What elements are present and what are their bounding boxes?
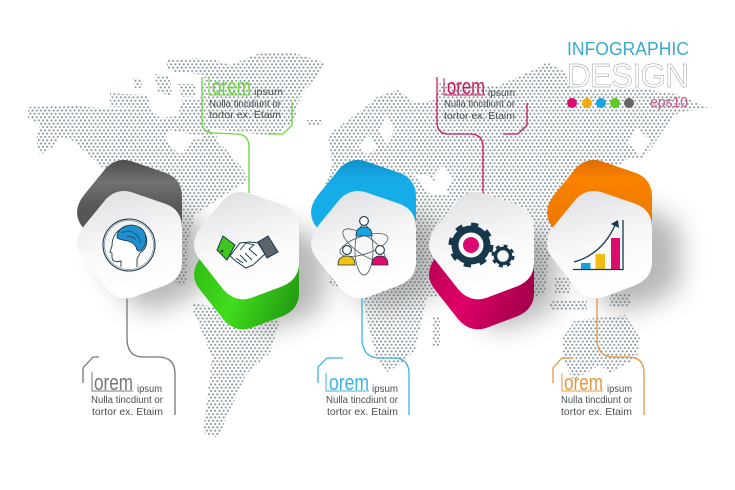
label: step 5 text: Nulla tincdiunt or xyxy=(561,394,632,406)
label: step 1 text xyxy=(91,370,163,418)
label: step 5 text xyxy=(561,370,632,418)
green back tab xyxy=(194,222,299,329)
white card xyxy=(429,192,534,299)
icon: head with brain xyxy=(103,219,155,271)
label: step 2 text: ipsum xyxy=(254,86,283,98)
connector: step 5 orange xyxy=(553,298,644,415)
label: step 5 text: ipsum xyxy=(607,383,632,395)
title xyxy=(567,39,689,111)
icon: gears xyxy=(451,225,513,266)
label: step 1 text: ipsum xyxy=(137,383,162,395)
label: step 4 text: Nulla tincdiunt or xyxy=(444,98,515,110)
icon: handshake xyxy=(217,236,278,268)
blue back tab xyxy=(311,160,416,267)
icon: atom with people xyxy=(337,217,391,275)
label: step 2 text: Nulla tincdiunt or xyxy=(209,98,281,110)
white card xyxy=(194,192,299,299)
connector: step 1 grey xyxy=(83,298,175,415)
title: INFOGRAPHIC xyxy=(567,39,689,59)
label: step 3 text: Nulla tincdiunt or xyxy=(326,394,398,406)
label: step 1 text: Nulla tincdiunt or xyxy=(91,394,163,406)
label: step 4 text: ipsum xyxy=(488,87,515,99)
grey back tab xyxy=(77,160,182,267)
label: step 2 text: tortor ex. Etaim xyxy=(209,109,281,121)
colour dots xyxy=(567,98,634,108)
dotted world map xyxy=(28,53,708,438)
label: step 1 text: orem xyxy=(94,370,133,395)
step 1 brain card xyxy=(77,160,182,298)
step 3 people atom card xyxy=(311,160,416,298)
title: eps10 xyxy=(650,94,688,111)
label: step 2 text: orem xyxy=(212,74,251,99)
label: step 3 text: tortor ex. Etaim xyxy=(327,406,398,418)
label: step 3 text xyxy=(326,370,398,418)
connector: step 2 green xyxy=(202,77,292,193)
label: step 4 text: orem xyxy=(447,74,485,99)
label: step 2 text xyxy=(209,74,283,121)
white card xyxy=(311,191,416,298)
label: step 1 text: tortor ex. Etaim xyxy=(92,406,163,418)
soft shadows xyxy=(101,203,680,328)
label: step 3 text: ipsum xyxy=(372,383,398,395)
white card xyxy=(547,191,652,298)
step 4 gears card xyxy=(429,192,534,329)
orange back tab xyxy=(547,160,652,267)
label: step 4 text xyxy=(444,74,515,122)
connector: step 3 blue xyxy=(318,298,409,415)
title: DESIGN xyxy=(567,57,689,94)
icon: bar chart with arrow xyxy=(573,220,623,270)
label: step 3 text: orem xyxy=(329,370,369,395)
connector: step 4 pink xyxy=(437,77,527,193)
label: step 5 text: tortor ex. Etaim xyxy=(561,406,632,418)
pink back tab xyxy=(429,222,534,329)
label: step 5 text: orem xyxy=(564,370,603,395)
step 5 growth chart card xyxy=(547,160,652,298)
step 2 handshake card xyxy=(194,192,299,329)
label: step 4 text: tortor ex. Etaim xyxy=(444,110,515,122)
white card xyxy=(77,191,182,298)
